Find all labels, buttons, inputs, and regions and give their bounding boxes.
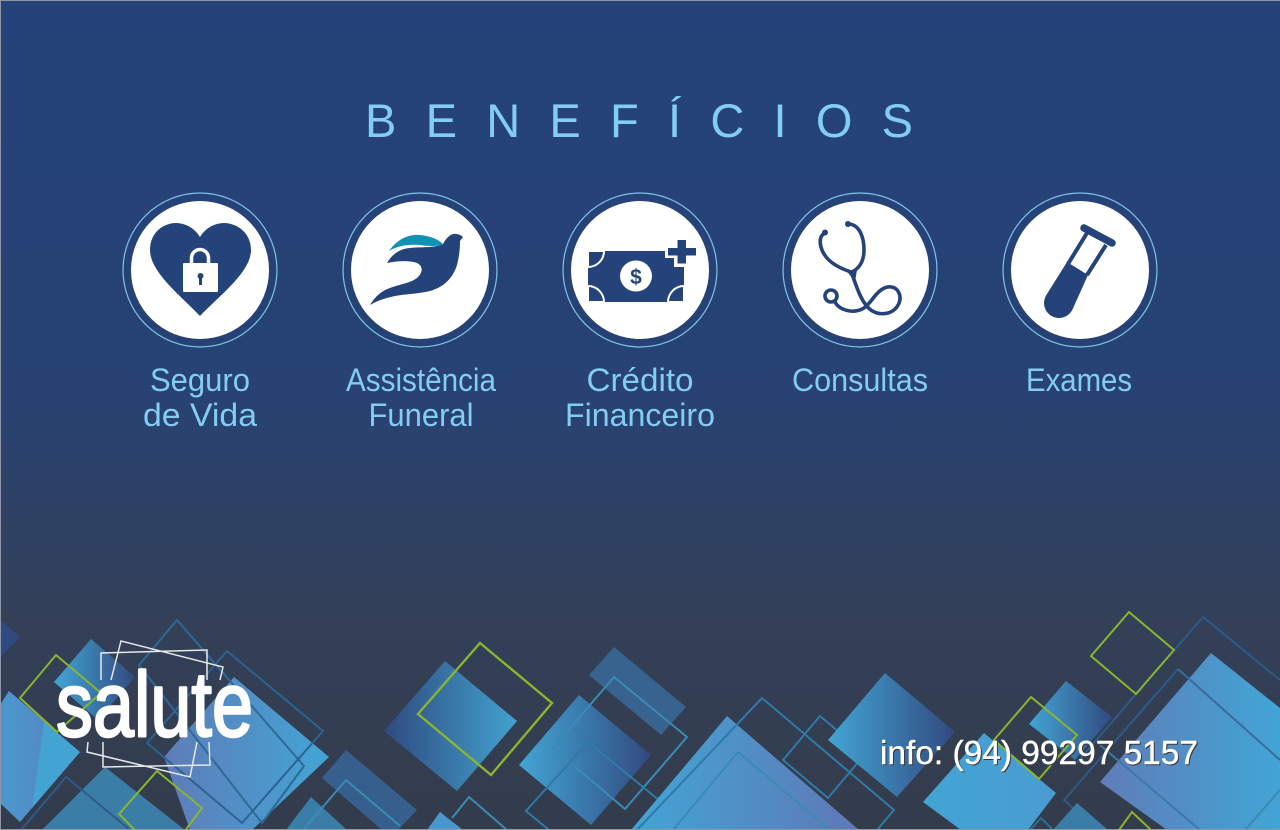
icon: heart with padlock xyxy=(123,193,277,347)
benefit: Crédito Financeiro xyxy=(563,193,717,433)
label: Crédito Financeiro: Financeiro xyxy=(565,397,715,433)
contact phone: info: (94) 99297 5157 xyxy=(880,734,1198,771)
icon: banknote with plus: $ xyxy=(630,266,642,289)
benefit: Exames xyxy=(1003,193,1157,398)
icon: banknote with plus xyxy=(563,193,717,347)
geometric diamonds, bottom band xyxy=(0,612,1280,830)
label: Consultas: Consultas xyxy=(792,362,928,398)
title: BENEFÍCIOS xyxy=(365,94,913,147)
icon: test tube xyxy=(1003,193,1157,347)
benefit: Assistência Funeral xyxy=(343,193,497,433)
label: Exames: Exames xyxy=(1026,362,1132,398)
icon: stethoscope xyxy=(783,193,937,347)
label: Seguro de Vida: de Vida xyxy=(143,397,257,433)
label: Assistência Funeral: Assistência xyxy=(346,362,496,398)
logo: salute xyxy=(56,641,253,777)
label: Assistência Funeral xyxy=(346,362,496,433)
label: Crédito Financeiro xyxy=(565,362,715,433)
logo: salute: salute xyxy=(56,654,253,756)
benefit: Consultas xyxy=(783,193,937,398)
label: Assistência Funeral: Funeral xyxy=(368,397,474,433)
label: Seguro de Vida: Seguro xyxy=(150,362,250,398)
label: Seguro de Vida xyxy=(143,362,257,433)
label: Crédito Financeiro: Crédito xyxy=(586,362,694,398)
benefit: Seguro de Vida xyxy=(123,193,277,433)
icon: dove xyxy=(343,193,497,347)
